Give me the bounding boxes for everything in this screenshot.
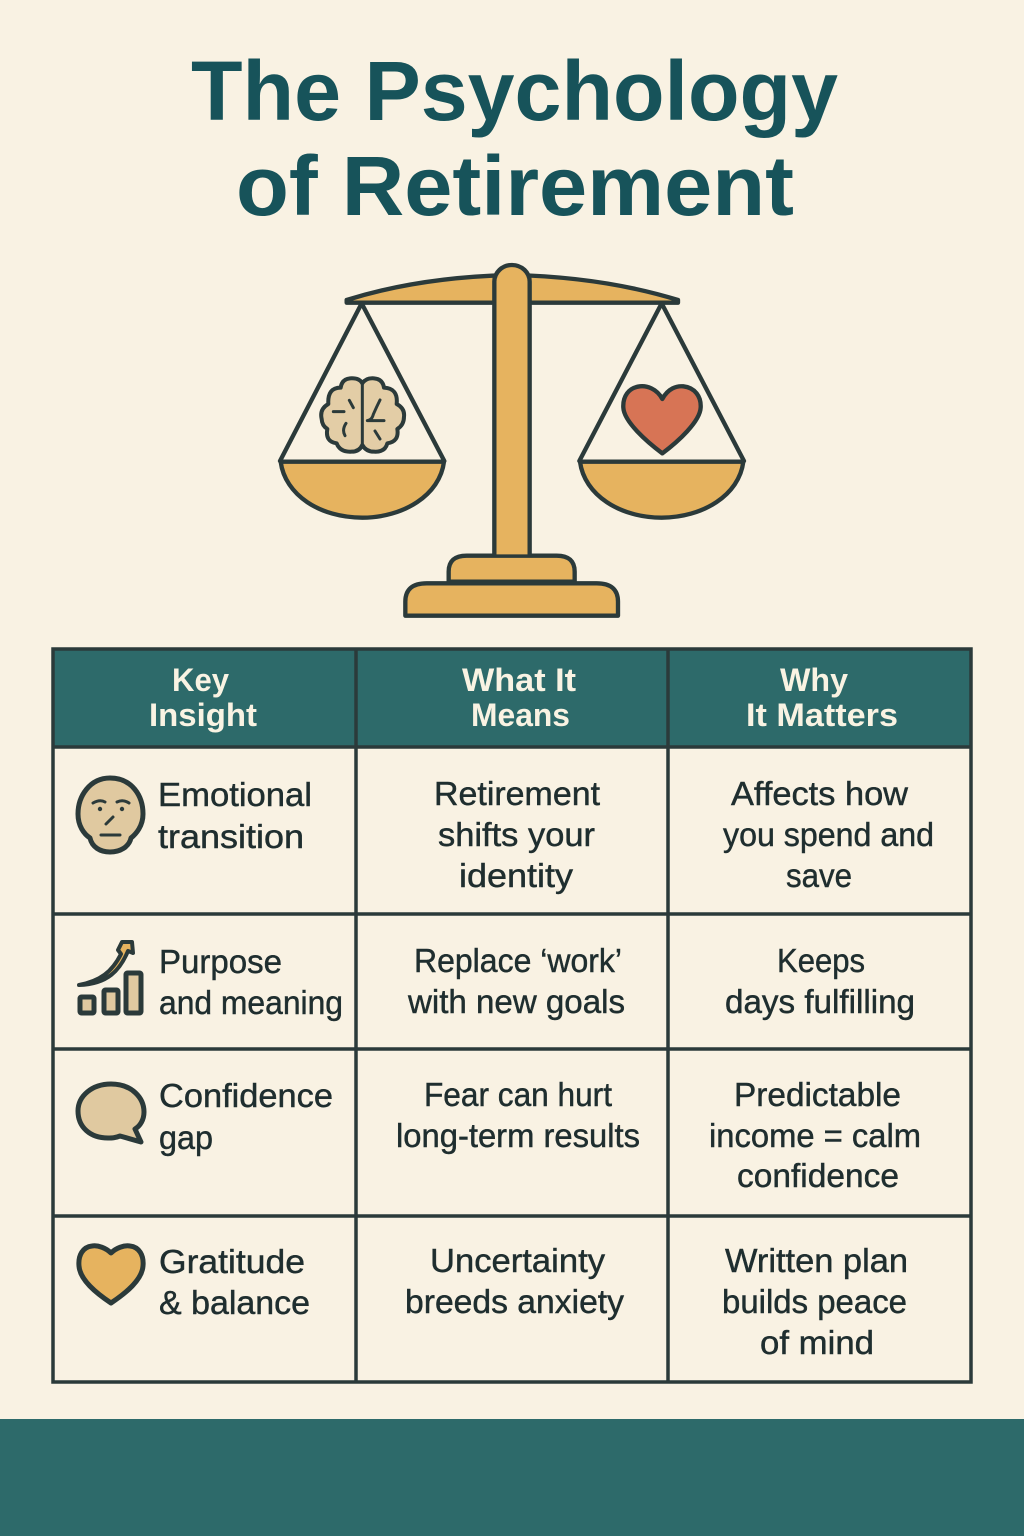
row 1 meaning: shifts your [438,816,595,853]
row 2 insight [159,943,343,1021]
row 2 why: days fulfilling [725,983,915,1020]
column heading: Key Insight: Key [172,662,229,698]
row 4 meaning [405,1242,624,1320]
column heading: What It Means [462,662,576,733]
icon: red heart [623,386,701,453]
row 4 why: Written plan [725,1242,908,1279]
illustration: balance scale [280,265,744,616]
row 1 meaning: Retirement [434,775,600,812]
row 3 why: Predictable [734,1076,901,1113]
table header band [53,649,971,747]
title: of Retirement [236,139,794,233]
column heading: What It Means: What It [462,662,576,698]
title: The Psychology [191,44,838,138]
row 3 why: income = calm [709,1117,921,1154]
row 2 insight: Purpose [159,943,282,980]
row 1 meaning [434,775,600,894]
icon: face [78,778,143,852]
column heading: Key Insight [149,662,257,733]
row 2 insight: and meaning [159,984,343,1021]
row 2 meaning: with new goals [407,983,625,1020]
table grid [53,649,971,1382]
row 3 meaning: Fear can hurt [424,1076,612,1113]
row 3 why: confidence [737,1157,899,1194]
row 3 meaning: long-term results [396,1117,640,1154]
icon: brain [321,378,404,452]
row 3 insight [159,1077,333,1156]
row 4 why [722,1242,908,1361]
left pan [280,303,444,518]
row 4 meaning: breeds anxiety [405,1283,624,1320]
icon: gold heart [79,1246,143,1303]
right pan [579,303,744,518]
row 2 meaning: Replace ‘work’ [414,942,622,979]
icon: growth chart [79,942,141,1013]
scale base [405,583,618,616]
row 1 insight: Emotional [158,776,312,813]
row 2 why: Keeps [777,942,865,979]
table [53,649,971,1382]
column heading: What It Means: Means [471,697,570,733]
row 1 why: Affects how [731,775,908,812]
column heading: Why It Matters [746,662,898,733]
footer band [0,1419,1024,1536]
row 1 why: save [786,857,852,894]
scale base lower riser [449,556,575,582]
row 3 why [709,1076,921,1194]
row 4 insight: & balance [159,1284,310,1321]
row 4 insight [159,1243,310,1321]
column heading: Why It Matters: Why [780,662,848,698]
row 3 meaning [396,1076,640,1154]
title [191,44,838,233]
column heading: Why It Matters: It Matters [746,697,898,733]
row 2 meaning [407,942,625,1020]
scale post [494,265,530,554]
icon: speech bubble [78,1084,144,1142]
row 1 why [723,775,934,894]
column heading: Key Insight: Insight [149,697,257,733]
row 2 why [725,942,915,1020]
row 3 insight: Confidence [159,1077,333,1114]
scale beam [347,275,678,303]
row 1 why: you spend and [723,816,934,853]
row 4 meaning: Uncertainty [430,1242,606,1279]
row 4 why: of mind [760,1324,874,1361]
row 1 insight [158,776,312,855]
row 1 meaning: identity [459,857,574,894]
row 4 why: builds peace [722,1283,907,1320]
row 4 insight: Gratitude [159,1243,305,1280]
row 3 insight: gap [159,1119,213,1156]
row 1 insight: transition [158,818,304,855]
